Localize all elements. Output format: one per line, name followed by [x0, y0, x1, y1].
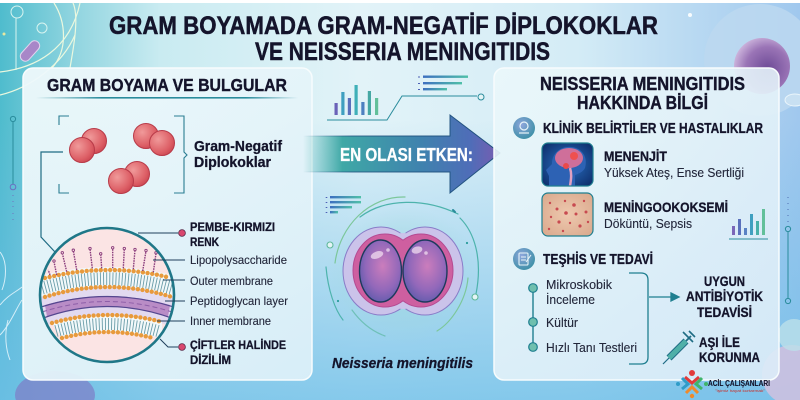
- leader lines: [138, 233, 185, 347]
- center list icon: [419, 76, 468, 90]
- label: gram-negatif diplokoklar: [194, 138, 283, 171]
- cell wall labels: Outer membrane: [190, 274, 273, 288]
- heading: teshis ve tedavi: TEŞHİS VE TEDAVİ: [543, 251, 653, 268]
- text: asi ile korunma: AŞI İLE: [699, 334, 740, 350]
- connector line: [41, 152, 63, 252]
- brackets: [59, 116, 187, 193]
- cell wall labels: RENK: [190, 235, 219, 249]
- arrow: en olasi etken: [303, 115, 500, 193]
- text: uygun antibiyotik tedavisi: ANTİBİYOTİK: [686, 288, 763, 304]
- diagnostics list: [546, 277, 637, 355]
- cell wall labels: [190, 220, 288, 367]
- diagnostics list: Kültür: [546, 315, 579, 330]
- text: asi ile korunma: KORUNMA: [699, 349, 760, 365]
- text: menenjit: MENENJİT: [604, 148, 667, 164]
- text: menenjit: [604, 148, 744, 180]
- text: meningookoksemi: MENİNGOOKOKSEMİ: [604, 199, 728, 215]
- cell wall magnified circle: [38, 228, 177, 362]
- arrow: en olasi etken: EN OLASI ETKEN:: [340, 144, 473, 165]
- text: uygun antibiyotik tedavisi: TEDAVİSİ: [697, 304, 752, 320]
- heading: gram boyama: GRAM BOYAMA VE BULGULAR: [47, 75, 287, 95]
- marker dot: pembe-kirmizi: [179, 230, 185, 236]
- logo: acil calisanlari: ACİL ÇALIŞANLARI: [708, 379, 770, 388]
- diplococci group: [70, 124, 174, 194]
- text: menenjit: Yüksek Ateş, Ense Sertliği: [604, 165, 744, 180]
- cell wall labels: Peptidoglycan layer: [190, 294, 288, 308]
- image: rash: [542, 193, 593, 236]
- diagnostics list: Hızlı Tanı Testleri: [546, 340, 637, 355]
- title: GRAM BOYAMADA GRAM-NEGATİF DİPLOKOKLAR: [109, 12, 658, 40]
- center bar chart: [327, 85, 484, 120]
- title: [109, 12, 658, 66]
- small bar chart: [729, 209, 768, 240]
- icon: clinical: [513, 117, 535, 139]
- marker dot: ciftler: [179, 344, 185, 350]
- panel: gram boyama ve bulgular: [23, 68, 312, 380]
- panel: neisseria meningitidis bilgi: [494, 68, 779, 380]
- bracket and arrow: [629, 273, 679, 364]
- label: gram-negatif diplokoklar: Gram-Negatif: [194, 138, 283, 155]
- cell wall labels: Lipopolysaccharide: [190, 253, 287, 267]
- text: meningookoksemi: Döküntü, Sepsis: [604, 216, 692, 231]
- image: brain: [542, 143, 593, 186]
- icon: syringe: [663, 331, 695, 364]
- heading: neisseria: NEISSERIA MENINGITIDIS: [540, 74, 745, 94]
- small list icon: [326, 196, 361, 213]
- heading: neisseria: [540, 74, 745, 113]
- left side decoration: [10, 116, 16, 220]
- icon: diagnosis: [513, 248, 535, 270]
- right side decoration: [785, 197, 791, 304]
- text: uygun antibiyotik tedavisi: [686, 273, 763, 320]
- text: meningookoksemi: [604, 199, 728, 231]
- title: VE NEISSERIA MENINGITIDIS: [255, 38, 550, 66]
- heading: neisseria: HAKKINDA BİLGİ: [577, 93, 708, 113]
- logo: acil calisanlari: "işimiz hayat kurtarmak": [715, 388, 766, 393]
- text: asi ile korunma: [699, 334, 760, 365]
- cell wall labels: DİZİLİM: [190, 352, 231, 367]
- cell wall labels: PEMBE-KIRMIZI: [190, 220, 275, 234]
- diagnostics list: Mikroskobik: [546, 277, 612, 292]
- text: uygun antibiyotik tedavisi: UYGUN: [704, 273, 745, 289]
- caption: neisseria meningitilis: Neisseria meningitilis: [332, 355, 473, 372]
- cell wall labels: ÇİFTLER HALİNDE: [190, 337, 286, 352]
- logo: acil calisanlari: [676, 370, 770, 398]
- timeline: [529, 284, 537, 351]
- diagnostics list: İnceleme: [546, 292, 595, 307]
- label: gram-negatif diplokoklar: Diplokoklar: [194, 154, 271, 171]
- cell wall labels: Inner membrane: [190, 314, 271, 328]
- illustration: neisseria diplococcus: [325, 197, 481, 343]
